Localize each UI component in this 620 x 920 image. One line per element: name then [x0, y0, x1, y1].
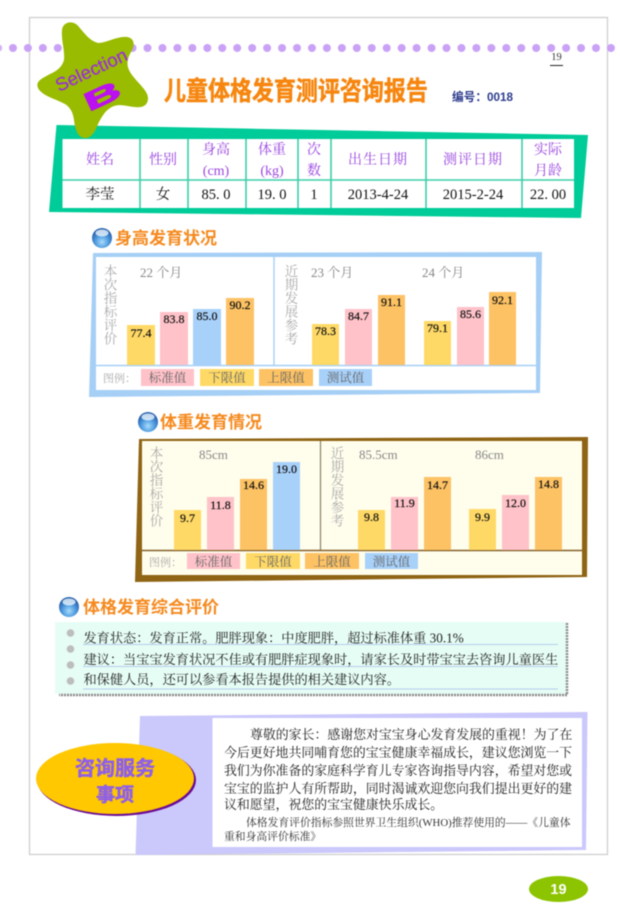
bar chart: 85cm: 85cm — [199, 447, 228, 462]
table panel: basic information — [49, 125, 588, 218]
table data row: 2013-4-24 — [348, 187, 409, 203]
bar chart: 22 months — [127, 265, 254, 365]
bar chart: 86cm — [469, 447, 562, 550]
legend: 下限值 — [208, 370, 246, 385]
bar chart: 24 months: 24 个月 — [422, 265, 464, 280]
bar chart: 86cm: 86cm — [475, 447, 504, 462]
side label: current: 本次指标评价 — [102, 263, 117, 345]
legend — [149, 553, 418, 569]
table data row: 1 — [310, 187, 318, 203]
bar chart: 22 months: 90.2 — [230, 298, 250, 312]
table header row: 实际 — [534, 142, 563, 158]
bar chart: 85cm: 11.8 — [210, 498, 231, 512]
icon: blue ball — [59, 597, 79, 617]
table header row — [86, 141, 563, 179]
table header row: 次 — [307, 142, 321, 158]
bar chart: 85.5cm: 14.7 — [427, 478, 448, 492]
evaluation text: 建议：当宝宝发育状况不佳或有肥胖症现象时，请家长及时带宝宝去咨询儿童医生 — [84, 651, 558, 668]
side label: recent: 近期发展参考 — [282, 264, 298, 345]
heading: weight: 体重发育情况 — [160, 412, 262, 432]
legend: 标准值 — [149, 370, 187, 385]
report number: 编号：0018 — [452, 89, 513, 104]
legend — [103, 369, 372, 386]
bar chart: 86cm: 14.8 — [538, 477, 559, 491]
table data row: 李莹 — [86, 185, 114, 203]
bar chart: 85.5cm — [358, 447, 451, 550]
bar chart: 23 months: 84.7 — [348, 309, 369, 323]
letter text: 今后更好地共同哺育您的宝宝健康幸福成长，建议您浏览一下 — [224, 745, 572, 761]
panel: consulting service — [136, 712, 588, 855]
evaluation text: 发育状态：发育正常。肥胖现象：中度肥胖，超过标准体重 30.1% — [84, 630, 464, 646]
bar chart: 85cm: 9.7 — [180, 511, 195, 525]
letter text: 尊敬的家长：感谢您对宝宝身心发育发展的重视！为了在 — [250, 727, 572, 742]
letter text: 体格发育评价指标参照世界卫生组织(WHO)推荐使用的——《儿童体 — [246, 815, 571, 829]
legend: 测试值 — [327, 370, 365, 385]
bar chart: 22 months: 77.4 — [130, 326, 152, 340]
bar chart: 85cm: 14.6 — [243, 478, 264, 492]
bar chart: 85.5cm: 11.9 — [394, 496, 415, 510]
bar chart: 23 months: 91.1 — [381, 295, 402, 309]
bullets — [67, 629, 74, 685]
table header row: (kg) — [260, 164, 284, 179]
page number top — [550, 52, 563, 66]
bar chart: 86cm: 12.0 — [505, 496, 526, 510]
title: 儿童体格发育测评咨询报告 — [164, 76, 428, 107]
bar chart: 85.5cm: 9.8 — [364, 510, 379, 524]
bar chart: 24 months: 92.1 — [492, 293, 513, 307]
bar chart: 85cm: 19.0 — [276, 462, 297, 476]
callout: consulting oval: 事项 — [96, 784, 134, 806]
legend: 标准值 — [195, 554, 233, 569]
star shape — [37, 22, 148, 138]
star label: Selection — [52, 44, 130, 96]
bar chart: 85cm — [174, 447, 300, 550]
heading: overall evaluation: 体格发育综合评价 — [83, 597, 219, 617]
letter text: 议和愿望，祝您的宝宝健康快乐成长。 — [224, 797, 443, 813]
table data row: 85. 0 — [202, 187, 230, 203]
heading: height: 身高发育状况 — [115, 228, 217, 248]
table data row: 22. 00 — [530, 187, 566, 203]
bar chart: 23 months — [311, 265, 405, 365]
bar chart: 24 months: 79.1 — [427, 321, 448, 335]
evaluation text: 和保健人员，还可以参看本报告提供的相关建议内容。 — [84, 671, 400, 688]
bar chart: 23 months: 23 个月 — [311, 265, 353, 280]
side label: recent: 近期发展参考 — [328, 446, 344, 527]
table header row: 测评日期 — [443, 152, 503, 168]
bar chart: 22 months: 83.8 — [164, 312, 184, 326]
callout: consulting oval: 咨询服务 — [75, 757, 155, 780]
bar chart: 22 months: 85.0 — [196, 309, 218, 323]
table header row: 性别 — [149, 151, 177, 168]
letter text — [224, 727, 572, 843]
panel: height chart — [89, 252, 542, 397]
table header row: 体重 — [258, 141, 286, 158]
legend: 下限值 — [254, 554, 292, 569]
letter B: B — [79, 75, 125, 117]
bar chart: 23 months: 78.3 — [315, 324, 336, 338]
table header row: 出生日期 — [348, 151, 408, 168]
table header row: 数 — [307, 162, 321, 179]
bar chart: 24 months: 85.6 — [460, 307, 481, 321]
legend: 测试值 — [373, 554, 411, 569]
bar chart: 85.5cm: 85.5cm — [359, 447, 398, 462]
legend: 上限值 — [313, 554, 351, 569]
bar chart: 24 months — [422, 265, 516, 365]
panel: weight chart — [135, 437, 588, 582]
side label: current: 本次指标评价 — [148, 445, 163, 527]
bar chart: 86cm: 9.9 — [475, 510, 490, 524]
legend: 图例： — [103, 371, 136, 385]
page number badge: 19 — [550, 882, 567, 898]
table data row: 19. 0 — [258, 187, 286, 203]
table header row: 月龄 — [534, 162, 562, 179]
page number badge — [529, 876, 588, 902]
callout: consulting oval — [36, 743, 196, 816]
table header row: 姓名 — [86, 151, 114, 168]
dotted purple band — [0, 44, 620, 52]
table data row — [86, 185, 566, 203]
icon: blue ball — [92, 228, 112, 248]
legend: 图例： — [149, 555, 182, 569]
star badge — [37, 22, 148, 138]
table data row: 女 — [156, 186, 170, 203]
page number top: 19 — [551, 52, 562, 63]
letter text: 宝宝的监护人有所帮助，同时渴诚欢迎您向我们提出更好的建 — [224, 781, 572, 797]
letter text: 重和身高评价标准》 — [224, 829, 321, 843]
table header row: (cm) — [203, 164, 230, 179]
panel: overall evaluation — [55, 622, 567, 695]
legend: 上限值 — [267, 370, 305, 385]
bar chart: 22 months: 22 个月 — [140, 265, 182, 280]
table header row: 身高 — [202, 141, 230, 158]
icon: blue ball — [138, 412, 158, 432]
evaluation text — [84, 630, 558, 688]
letter text: 我们为你准备的家庭科学育儿专家咨询指导内容，希望对您或 — [224, 763, 572, 779]
table data row: 2015-2-24 — [443, 187, 504, 203]
